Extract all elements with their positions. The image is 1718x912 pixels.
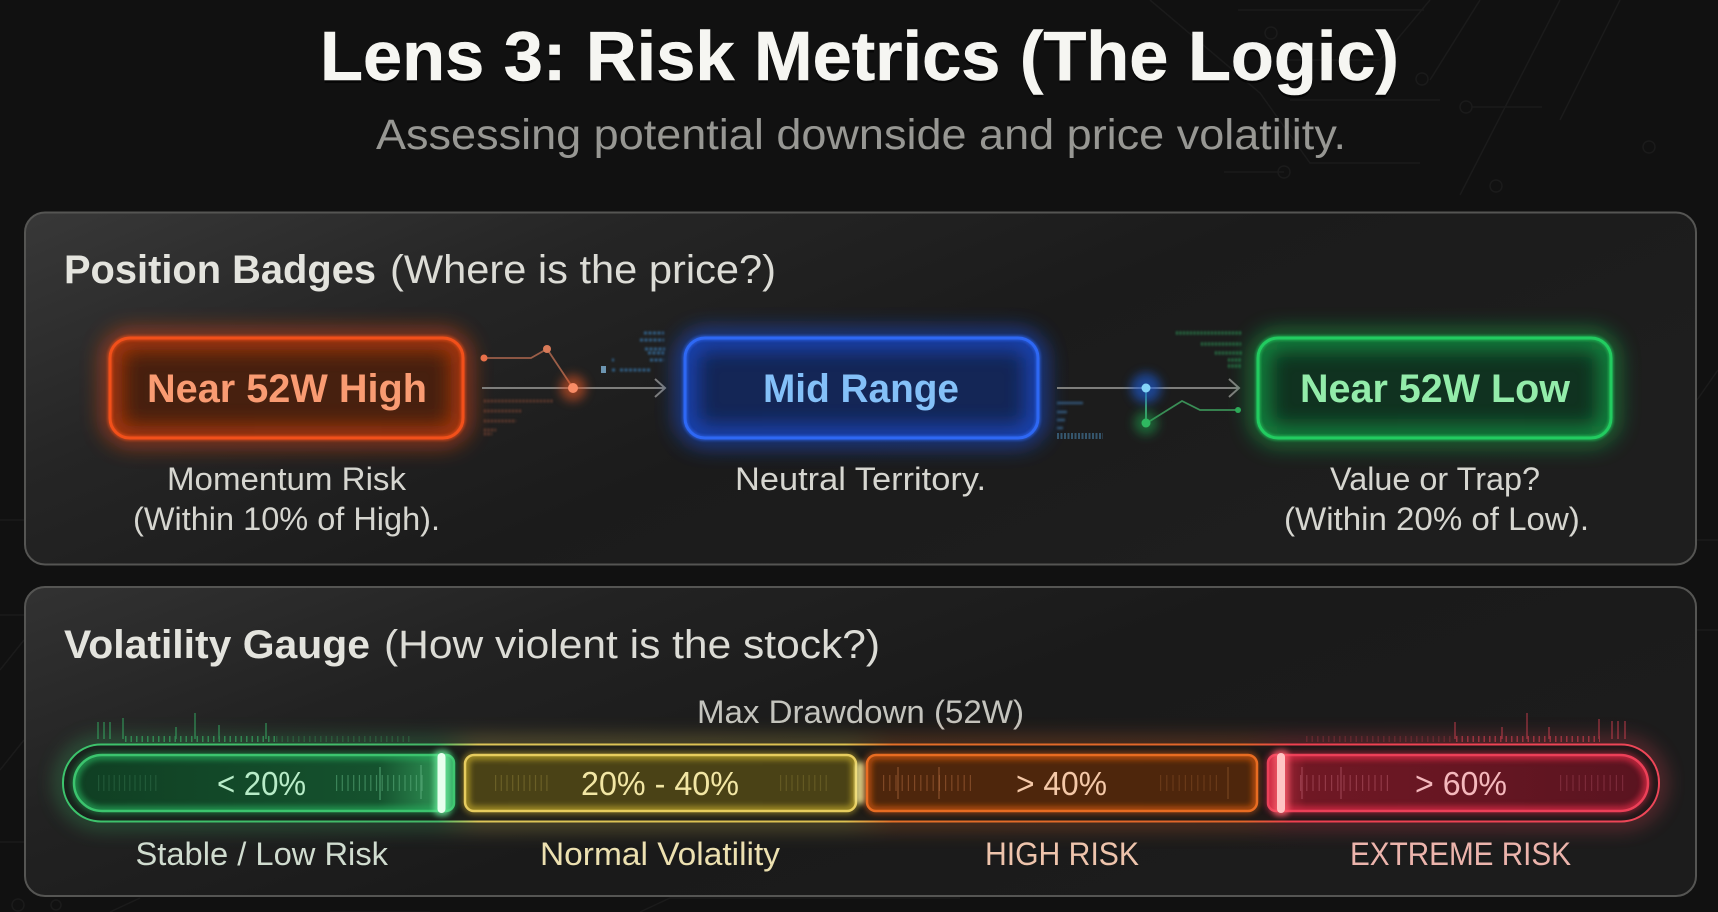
badge description: value or trap: (Within 20% of Low). xyxy=(1284,501,1589,537)
badge description: value or trap xyxy=(1284,461,1589,537)
segment: over 60%: > 60% xyxy=(1415,765,1507,802)
arrow: high to mid xyxy=(480,333,665,434)
badge: near 52W low: Near 52W Low xyxy=(1300,367,1571,411)
marker: green limit xyxy=(434,750,450,816)
subtitle: Assessing potential downside and price volatility. xyxy=(376,111,1346,159)
heading: volatility gauge: (How violent is the stock?) xyxy=(384,623,880,667)
segment: under 20% xyxy=(74,755,454,811)
heading: volatility gauge: Volatility Gauge xyxy=(64,623,370,667)
label: normal: Normal Volatility xyxy=(540,836,780,872)
segment: over 40%: > 40% xyxy=(1016,765,1107,802)
panel background xyxy=(25,212,1696,564)
scale ticks: left xyxy=(98,713,411,739)
marker: red limit xyxy=(1273,750,1289,816)
label: high risk: HIGH RISK xyxy=(985,836,1139,872)
badge: near 52W low xyxy=(1258,338,1611,438)
segment labels xyxy=(136,836,1571,872)
title: Lens 3: Risk Metrics (The Logic) xyxy=(320,20,1399,98)
heading: volatility gauge xyxy=(64,623,880,667)
heading: position badges: Position Badges xyxy=(64,248,376,292)
badge description: momentum risk: Momentum Risk xyxy=(167,461,407,497)
badge: mid range: Mid Range xyxy=(763,367,959,411)
segment: over 60% xyxy=(1268,755,1648,811)
segment: under 20%: < 20% xyxy=(217,765,306,802)
gauge outer track xyxy=(63,744,1659,822)
panel: position badges xyxy=(25,212,1696,564)
segment: over 40% xyxy=(867,755,1257,811)
segment: 20% to 40%: 20% - 40% xyxy=(581,765,739,802)
panel: volatility gauge xyxy=(25,587,1696,896)
badge: near 52W high: Near 52W High xyxy=(147,367,427,411)
label: extreme risk: EXTREME RISK xyxy=(1350,836,1571,872)
badge description: momentum risk: (Within 10% of High). xyxy=(133,501,440,537)
marker: yellow limit xyxy=(856,762,865,804)
badge: mid range xyxy=(685,338,1038,438)
badge description: neutral territory: Neutral Territory. xyxy=(735,461,986,497)
arrow: mid to low xyxy=(1057,333,1242,436)
badge: near 52W high xyxy=(110,338,463,438)
title: Lens 3: Risk Metrics (The Logic) xyxy=(320,17,1399,95)
gauge axis label: Max Drawdown (52W) xyxy=(697,694,1024,730)
scale ticks: right xyxy=(1306,713,1625,739)
label: stable: Stable / Low Risk xyxy=(136,836,389,872)
heading: position badges: (Where is the price?) xyxy=(390,248,776,292)
panel background xyxy=(25,587,1696,896)
segment: 20% to 40% xyxy=(465,755,856,811)
badge description: momentum risk xyxy=(133,461,440,537)
badge description: value or trap: Value or Trap? xyxy=(1330,461,1540,497)
heading: position badges xyxy=(64,248,776,292)
